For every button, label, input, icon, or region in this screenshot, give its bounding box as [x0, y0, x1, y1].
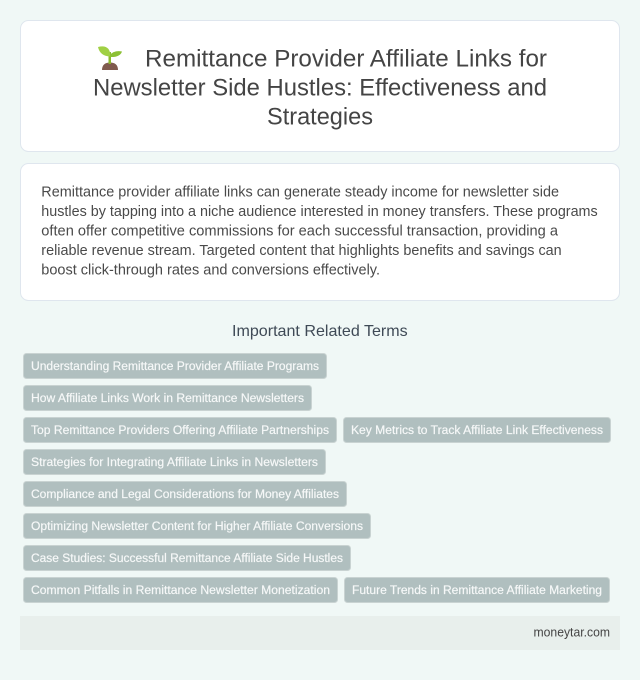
heading: related terms: Important Related Terms	[232, 323, 408, 340]
tag: key metrics: Key Metrics to Track Affiliate Link Effectiveness	[351, 423, 603, 437]
tag: common pitfalls: Common Pitfalls in Remittance Newsletter Monetization	[31, 583, 330, 597]
tag: understanding programs: Understanding Remittance Provider Affiliate Programs	[31, 359, 319, 373]
tag: strategies: Strategies for Integrating Affiliate Links in Newsletters	[31, 455, 318, 469]
tag: common pitfalls	[24, 578, 338, 602]
summary text: hustles by tapping into a niche audience interested in money transfers. These programs	[41, 204, 598, 220]
summary text: often offer competitive commissions for each successful transaction, providing a	[41, 224, 558, 240]
tag: strategies	[24, 450, 326, 474]
summary text: boost click-through rates and conversions effectively.	[41, 263, 380, 279]
summary text	[41, 185, 598, 279]
tag: how links work: How Affiliate Links Work in Remittance Newsletters	[31, 391, 304, 405]
panel: summary card	[20, 164, 620, 300]
summary text: Remittance provider affiliate links can generate steady income for newsletter side	[41, 185, 559, 201]
summary text: reliable revenue stream. Targeted content that highlights benefits and savings can	[41, 243, 562, 259]
tag: optimizing content: Optimizing Newsletter Content for Higher Affiliate Conversions	[31, 519, 363, 533]
tag: how links work	[24, 386, 312, 410]
footer source: moneytar.com	[534, 625, 610, 640]
tag: top providers	[24, 418, 336, 442]
title: Strategies	[267, 104, 373, 131]
tag: future trends: Future Trends in Remittance Affiliate Marketing	[352, 583, 602, 597]
panel: title card	[20, 20, 620, 152]
tag: understanding programs	[24, 354, 326, 378]
tag list: related terms	[24, 354, 610, 602]
tag: case studies: Case Studies: Successful Remittance Affiliate Side Hustles	[31, 551, 343, 565]
tag: future trends	[344, 578, 610, 602]
tag: top providers: Top Remittance Providers Offering Affiliate Partnerships	[31, 423, 329, 437]
title	[93, 46, 547, 131]
footer bar	[20, 616, 620, 650]
title: Remittance Provider Affiliate Links for	[145, 46, 547, 73]
title: Newsletter Side Hustles: Effectiveness and	[93, 75, 547, 102]
tag: key metrics	[344, 418, 610, 442]
icon: seedling	[98, 46, 122, 70]
tag: compliance	[24, 482, 346, 506]
tag: optimizing content	[24, 514, 370, 538]
tag: case studies	[24, 546, 350, 570]
tag: compliance: Compliance and Legal Considerations for Money Affiliates	[31, 487, 339, 501]
